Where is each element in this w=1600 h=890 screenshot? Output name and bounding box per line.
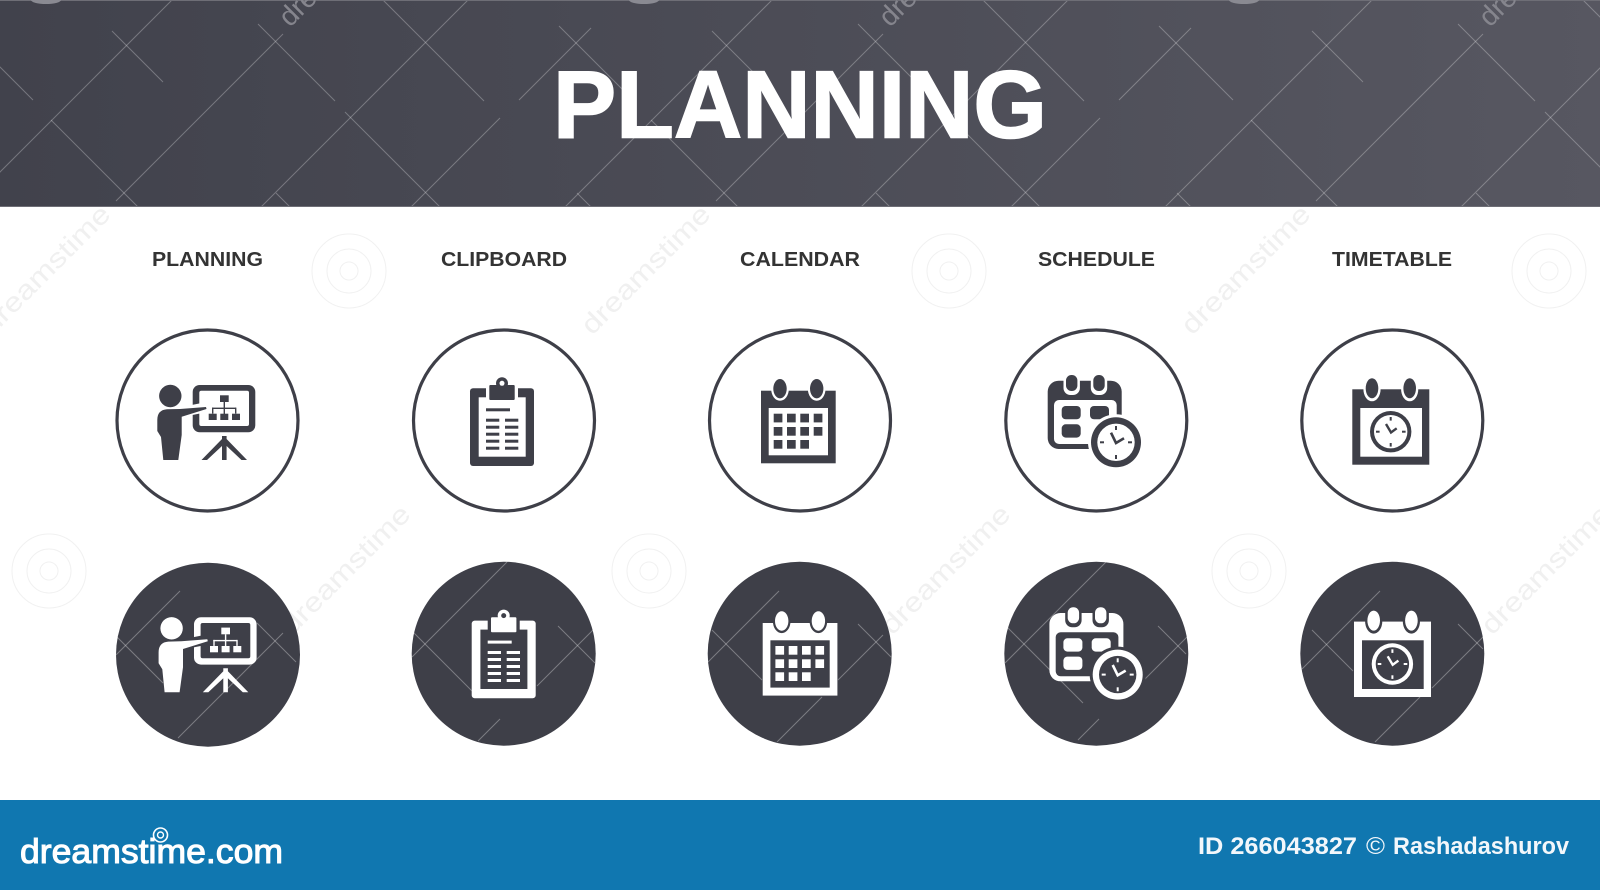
watermarks on white area: dreamstime (1475, 499, 1600, 640)
filled circle: planning (116, 563, 300, 747)
filled circle: timetable (1300, 562, 1484, 746)
outline circle: clipboard (414, 330, 594, 511)
icon: calendar with clock (filled row) (1049, 604, 1146, 703)
title: PLANNING (553, 52, 1047, 158)
watermarks on white area (0, 199, 1600, 640)
label: timetable: TIMETABLE (1332, 248, 1452, 271)
filled circle: schedule (1004, 562, 1188, 746)
icon: calendar page with clock (filled row) (1354, 609, 1431, 697)
outline circle: calendar (710, 330, 890, 511)
icon: clipboard (outline row) (470, 377, 534, 466)
outline circle: schedule (1006, 330, 1187, 511)
label: planning: PLANNING (152, 248, 263, 271)
footer credit: Rashadashurov (1393, 833, 1569, 860)
icon: calendar (filled row) (763, 610, 837, 696)
footer credit: ID 266043827 (1198, 833, 1357, 860)
label: clipboard: CLIPBOARD (441, 248, 567, 271)
filled circle: clipboard (412, 562, 596, 746)
label: calendar: CALENDAR (740, 248, 860, 271)
footer logo: dreamstime.com (20, 833, 283, 871)
outline circle: planning (117, 330, 298, 511)
icon: presenter at board (filled row) (159, 617, 257, 692)
outline circle: timetable (1302, 330, 1483, 511)
icon: clipboard (filled row) (472, 610, 536, 698)
filled circle: calendar (708, 562, 892, 746)
icon: calendar page with clock (outline row) (1352, 377, 1429, 465)
icon: calendar (outline row) (761, 377, 836, 463)
watermarks on white area: dreamstime (275, 499, 416, 640)
footer bar (0, 800, 1600, 890)
watermarks on white area: dreamstime (575, 199, 716, 340)
header banner (0, 0, 1600, 207)
footer credit (1198, 833, 1569, 860)
icon: presenter at board (outline row) (157, 385, 255, 460)
footer credit: © (1366, 833, 1385, 860)
label: schedule: SCHEDULE (1038, 248, 1155, 271)
watermarks on white area: dreamstime (1175, 199, 1316, 340)
icon: calendar with clock (outline row) (1048, 372, 1144, 470)
watermarks on white area: dreamstime (875, 499, 1016, 640)
